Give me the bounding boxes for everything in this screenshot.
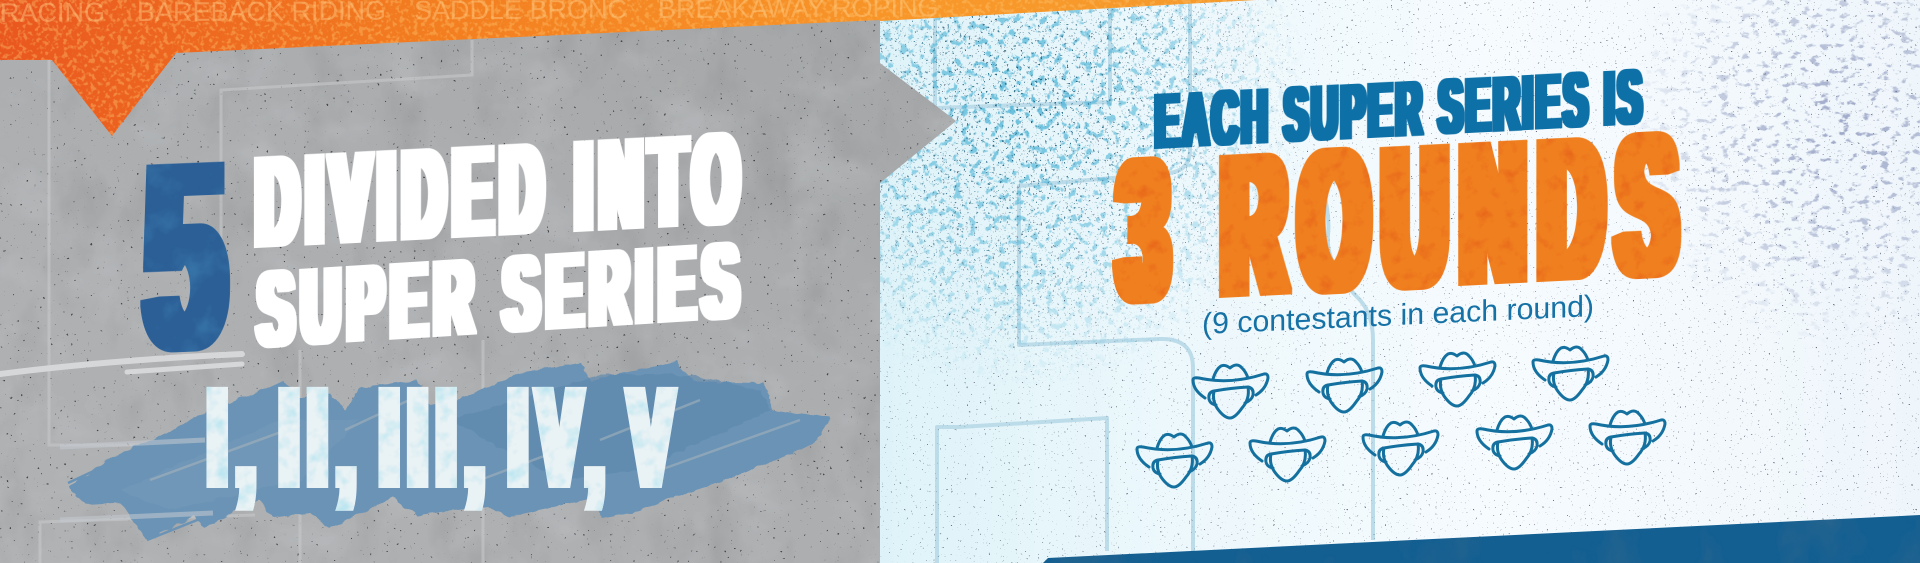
- icon: contestant 8: [1477, 416, 1552, 469]
- icon: contestant 2: [1307, 359, 1382, 412]
- text: contestant note: (9 contestants in each round): [1202, 290, 1594, 341]
- icon: contestant 3: [1420, 353, 1495, 406]
- text: 5: 5: [146, 108, 224, 404]
- infographic: SUPER SERIES: [258, 219, 746, 369]
- icon: contestant 1: [1193, 365, 1268, 418]
- panel: orange top band: [0, 0, 1256, 140]
- icon: contestant 6: [1250, 428, 1325, 481]
- panel: light speckled background: [880, 0, 1920, 563]
- panel: blue bottom band: [1040, 510, 1920, 563]
- brush stroke behind numerals: [60, 362, 830, 540]
- icon: contestant 4: [1533, 347, 1608, 400]
- infographic: DIVIDED INTO: [256, 107, 747, 274]
- chalk swoosh under the 5: [0, 354, 242, 374]
- panel: concrete arrow panel: [0, 0, 960, 563]
- icon: contestant 7: [1363, 422, 1438, 475]
- icon: contestant 9: [1590, 411, 1665, 464]
- icon: contestant 5: [1137, 434, 1212, 487]
- infographic: I, II, III, IV, V: [208, 356, 683, 520]
- icon group: nine cowboy contestants: [1137, 347, 1665, 487]
